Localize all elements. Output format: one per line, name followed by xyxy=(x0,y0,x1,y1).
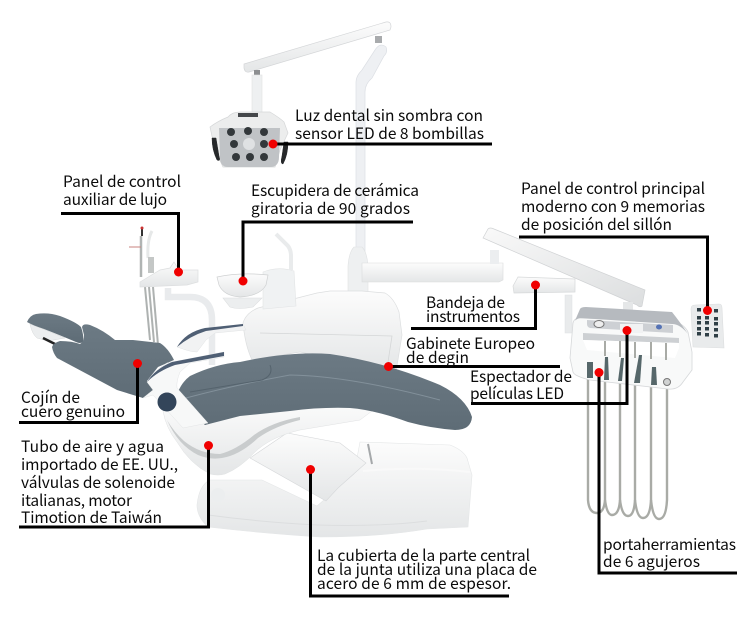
label: auxiliary panel: Panel de control xyxy=(63,170,181,192)
label: european cabinet xyxy=(406,332,535,368)
label: LED film viewer: Espectador de xyxy=(470,365,572,387)
middle joint cover xyxy=(250,433,366,501)
label: instrument tray xyxy=(426,291,520,327)
label: auxiliary panel xyxy=(63,170,181,210)
label: air and water tube: Tubo de aire y agua xyxy=(21,435,164,457)
label: tool holder xyxy=(603,533,736,572)
label: leather cushion: Cojín de xyxy=(21,386,80,408)
label: spittoon: Escupidera de cerámica xyxy=(251,179,419,201)
label: central joint cover xyxy=(317,544,537,594)
backrest cushion xyxy=(52,324,174,398)
headrest xyxy=(27,313,83,344)
horizontal arm xyxy=(362,263,503,282)
base xyxy=(197,442,472,537)
label: instrument tray: instrumentos xyxy=(426,305,520,327)
label: main control panel: Panel de control principal xyxy=(521,177,705,199)
dental unit illustration xyxy=(27,22,724,537)
callout dots xyxy=(133,140,712,474)
light pole and arm xyxy=(244,22,391,260)
monitor bar xyxy=(483,228,645,307)
label: european cabinet: de degin xyxy=(406,346,469,368)
seat cushion xyxy=(178,353,472,430)
label: main control panel xyxy=(521,177,705,235)
keypad xyxy=(691,304,724,348)
label: instrument tray: Bandeja de xyxy=(426,291,505,313)
spittoon xyxy=(217,234,296,309)
label: dental light: Luz dental sin sombra con xyxy=(295,104,483,126)
label: dental light xyxy=(295,104,484,144)
label: tool holder: portaherramientas xyxy=(603,533,736,555)
label: LED film viewer xyxy=(470,365,572,404)
label: air and water tube: Timotion de Taiwán xyxy=(21,506,162,528)
instrument tray xyxy=(513,277,575,333)
grey shell trim xyxy=(167,417,300,459)
assistant instruments and tray xyxy=(129,226,212,365)
label: LED film viewer: películas LED xyxy=(470,382,564,404)
label: main control panel: moderno con 9 memorias xyxy=(521,195,705,217)
label: spittoon: giratoria de 90 grados xyxy=(251,197,410,219)
back armrest xyxy=(177,324,246,352)
label: spittoon xyxy=(251,179,419,219)
hoses xyxy=(588,375,667,519)
label: leather cushion: cuero genuino xyxy=(21,400,125,422)
label: central joint cover: acero de 6 mm de espesor. xyxy=(317,572,511,594)
label: auxiliary panel: auxiliar de lujo xyxy=(63,188,167,210)
label: leather cushion xyxy=(21,386,125,422)
label: air and water tube: italianas, motor xyxy=(21,489,133,511)
label: main control panel: de posición del sillón xyxy=(521,213,672,235)
label: tool holder: de 6 agujeros xyxy=(603,550,700,572)
callout leader lines xyxy=(19,144,737,596)
spittoon arm pole xyxy=(348,247,368,292)
label: air and water tube: importado de EE. UU., xyxy=(21,453,178,475)
cabinet xyxy=(243,291,402,372)
label: dental light: sensor LED de 8 bombillas xyxy=(295,122,484,144)
label: central joint cover: La cubierta de la parte central xyxy=(317,544,530,566)
chair shell xyxy=(163,400,380,475)
label: european cabinet: Gabinete Europeo xyxy=(406,332,535,354)
label: central joint cover: de la junta utiliza una placa de xyxy=(317,558,537,580)
dental lamp xyxy=(210,112,288,167)
front armrest xyxy=(143,352,224,428)
label: air and water tube: válvulas de solenoide xyxy=(21,471,175,493)
doctor control panel xyxy=(570,307,692,389)
label: air and water tube xyxy=(21,435,178,528)
